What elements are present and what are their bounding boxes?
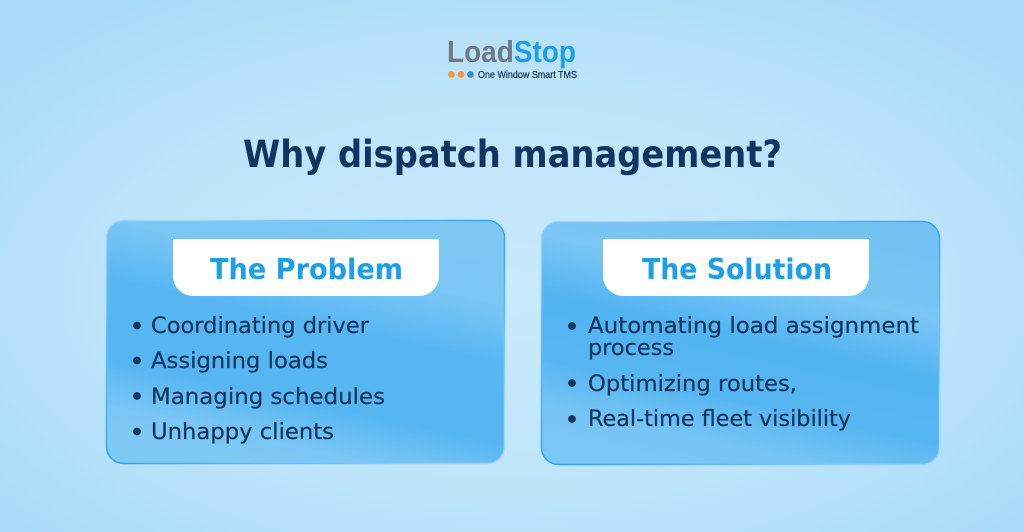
panel background: [542, 222, 940, 464]
bullet list: Optimizing routes,: [588, 372, 797, 397]
bullet list: Automating load assignment: [588, 314, 919, 339]
bullet list: Coordinating driver: [151, 314, 370, 339]
bullet list: [568, 314, 919, 432]
panel: the problem: [106, 220, 504, 464]
heading: The Problem: [210, 253, 403, 286]
bullet list: Managing schedules: [151, 385, 385, 410]
bullet list: process: [588, 336, 674, 361]
heading tab: [173, 239, 439, 296]
bullet list: Assigning loads: [151, 349, 328, 374]
bullet list: Real-time fleet visibility: [588, 407, 851, 432]
panel background: [106, 220, 504, 464]
logo tagline: One Window Smart TMS: [478, 70, 577, 81]
heading tab: [603, 239, 869, 296]
logo dots: [448, 71, 474, 78]
logo: [447, 34, 577, 81]
title: Why dispatch management?: [243, 133, 782, 176]
heading: The Solution: [642, 253, 832, 286]
bullet list: [133, 314, 385, 445]
logo wordmark: LoadStop: [447, 34, 576, 69]
panel: the solution: [542, 222, 940, 464]
bullet list: Unhappy clients: [151, 420, 334, 445]
